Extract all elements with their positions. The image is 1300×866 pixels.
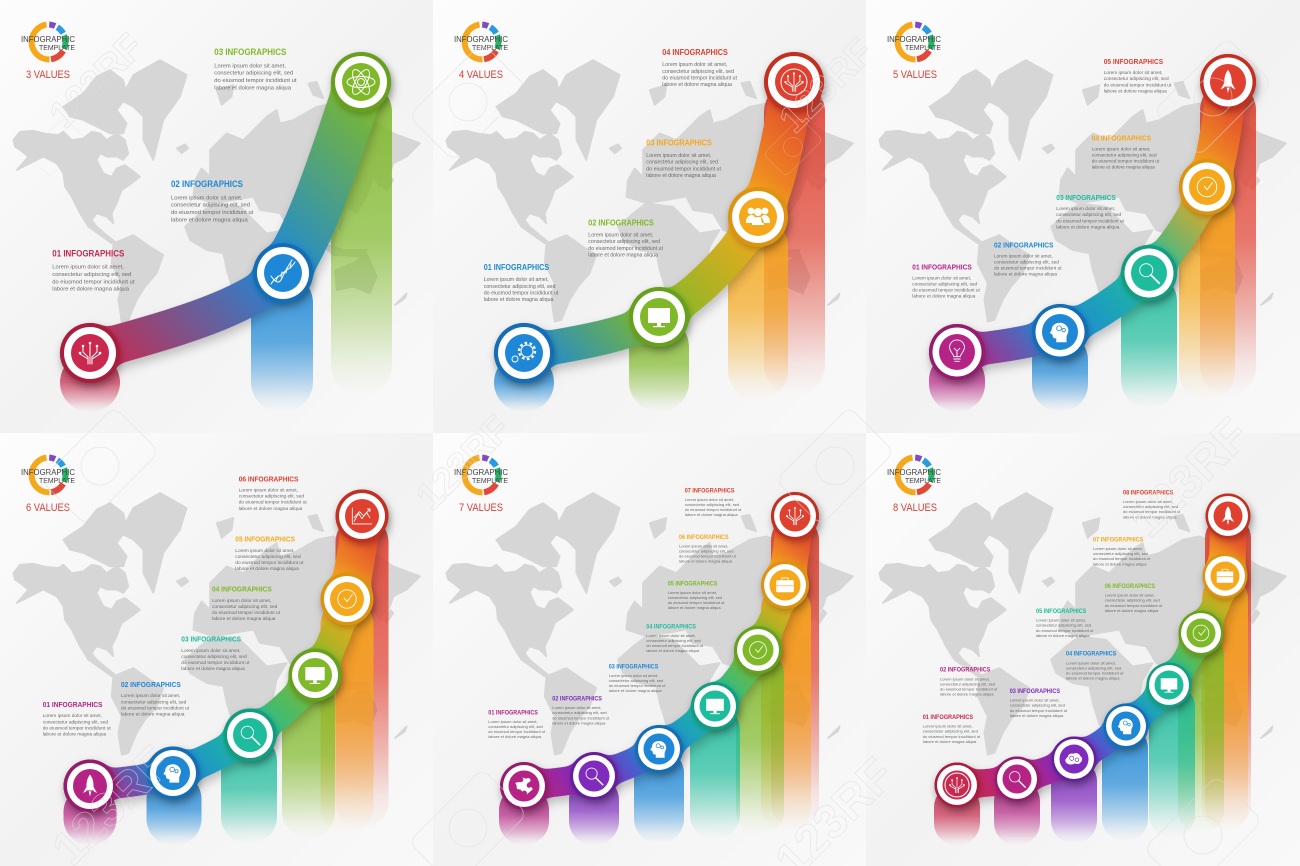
text block 02: Lorem ipsum dolor sit amet, xyxy=(588,232,653,238)
node 03 xyxy=(224,708,276,762)
logo: infographic template: TEMPLATE xyxy=(472,478,508,485)
text block 06: do eiusmod tempor incididunt ut xyxy=(679,554,737,559)
text block 01: Lorem ipsum dolor sit amet, xyxy=(488,719,538,724)
logo: infographic template xyxy=(454,24,508,59)
text block 04: consectetur adipiscing elit, sed xyxy=(1066,665,1121,670)
text block 05: labore et dolore magna aliqua xyxy=(1104,88,1167,94)
circle nodes and icons xyxy=(934,494,1250,808)
text block 03: labore et dolore magna aliqua xyxy=(1056,224,1120,230)
text block 01 xyxy=(923,714,981,744)
text block 04: do eiusmod tempor incididunt ut xyxy=(1066,671,1124,676)
node 05 xyxy=(1146,662,1192,708)
node 07 xyxy=(771,492,819,540)
text block 05 xyxy=(668,581,725,610)
node 07 xyxy=(1202,554,1248,598)
text block 02: 02 INFOGRAPHICS xyxy=(121,680,181,689)
text block 04: labore et dolore magna aliqua xyxy=(662,82,732,88)
text block 01: do eiusmod tempor incididunt ut xyxy=(43,725,111,731)
text block 04: consectetur adipiscing elit, sed xyxy=(212,604,278,610)
text block 07: labore et dolore magna aliqua xyxy=(685,512,738,517)
text block 05: do eiusmod tempor incididunt ut xyxy=(1104,82,1172,88)
text block 08: 08 INFOGRAPHICS xyxy=(1123,489,1173,496)
circle nodes and icons xyxy=(929,54,1256,380)
panel background xyxy=(866,0,1300,433)
text block 02: consectetur adipiscing elit, sed xyxy=(994,259,1059,265)
text block 08: do eiusmod tempor incididunt ut xyxy=(1123,509,1181,514)
text block 05: consectetur adipiscing elit, sed xyxy=(668,595,722,600)
text block 06: Lorem ipsum dolor sit amet, xyxy=(239,488,298,494)
text block 01: labore et dolore magna aliqua xyxy=(488,734,542,739)
text block 07: do eiusmod tempor incididunt ut xyxy=(1093,556,1151,561)
text block 06: consectetur adipiscing elit, sed xyxy=(239,494,304,500)
text block 04: Lorem ipsum dolor sit amet, xyxy=(212,598,271,604)
node 04 xyxy=(288,648,342,702)
text block 04: Lorem ipsum dolor sit amet, xyxy=(1066,660,1116,665)
panel: 7 values xyxy=(433,433,866,866)
text block 05: 05 INFOGRAPHICS xyxy=(1036,608,1086,615)
fading columns xyxy=(499,516,819,845)
text block 03: labore et dolore magna aliqua xyxy=(609,688,662,693)
text block 03: consectetur adipiscing elit, sed xyxy=(181,654,247,660)
fading columns xyxy=(494,82,825,412)
node 04 xyxy=(764,52,824,112)
node 02 xyxy=(994,756,1040,802)
world map xyxy=(879,493,1286,755)
logo: infographic template: TEMPLATE xyxy=(472,45,508,52)
text block 06 xyxy=(239,474,307,512)
circle nodes and icons xyxy=(494,52,824,383)
text block 02: labore et dolore magna aliqua xyxy=(121,711,185,717)
text block 03: 03 INFOGRAPHICS xyxy=(646,139,712,148)
text block 01: Lorem ipsum dolor sit amet, xyxy=(923,724,973,729)
text block 01 xyxy=(488,710,546,739)
text block 05: do eiusmod tempor incididunt ut xyxy=(1036,628,1094,633)
text block 04: 04 INFOGRAPHICS xyxy=(646,624,696,630)
text block 02: 02 INFOGRAPHICS xyxy=(940,667,990,674)
panel background xyxy=(433,433,866,866)
text block 02: Lorem ipsum dolor sit amet, xyxy=(552,705,602,710)
text block 04: 04 INFOGRAPHICS xyxy=(212,585,272,594)
text block 02: do eiusmod tempor incididunt ut xyxy=(994,266,1062,272)
text block 03: 03 INFOGRAPHICS xyxy=(1010,688,1060,695)
text block 03: labore et dolore magna aliqua xyxy=(1010,713,1064,718)
node 02 xyxy=(146,746,200,800)
watermark overlay: 123RF xyxy=(409,408,519,518)
text block 02: labore et dolore magna aliqua xyxy=(994,272,1057,278)
text block 07: do eiusmod tempor incididunt ut xyxy=(685,507,742,512)
logo: infographic template: INFOGRAPHIC xyxy=(887,467,941,477)
world map xyxy=(879,60,1286,322)
logo: infographic template: TEMPLATE xyxy=(39,45,75,52)
text block 06: consectetur adipiscing elit, sed xyxy=(1105,598,1160,603)
panel: 5 values xyxy=(866,0,1300,433)
text block 03: Lorem ipsum dolor sit amet, xyxy=(1056,206,1115,212)
text block 02: do eiusmod tempor incididunt ut xyxy=(588,246,663,252)
logo: infographic template xyxy=(21,24,75,59)
panel background xyxy=(866,433,1300,866)
panel: 3 values xyxy=(0,0,433,433)
text block 03: do eiusmod tempor incididunt ut xyxy=(1010,708,1068,713)
text block 03: consectetur adipiscing elit, sed xyxy=(1056,212,1122,218)
text block 05: 05 INFOGRAPHICS xyxy=(1104,57,1163,66)
heading: 7 values: 7 VALUES xyxy=(459,502,503,514)
text block 02: Lorem ipsum dolor sit amet, xyxy=(994,253,1053,259)
world map xyxy=(446,493,853,755)
logo: infographic template xyxy=(21,458,75,492)
text block 05: 05 INFOGRAPHICS xyxy=(668,581,717,587)
text block 04: consectetur adipiscing elit, sed xyxy=(662,69,734,75)
text block 02: Lorem ipsum dolor sit amet, xyxy=(171,195,243,201)
text block 08: labore et dolore magna aliqua xyxy=(1123,514,1177,519)
node 01 xyxy=(934,762,980,808)
node 04 xyxy=(1179,159,1235,215)
logo: infographic template: TEMPLATE xyxy=(39,478,75,485)
text block 05: consectetur adipiscing elit, sed xyxy=(1036,623,1091,628)
node 06 xyxy=(336,490,388,542)
text block 04: do eiusmod tempor incididunt ut xyxy=(212,610,281,616)
text block 01 xyxy=(484,263,559,303)
text block 06: Lorem ipsum dolor sit amet, xyxy=(679,543,728,548)
heading: 4 values: 4 VALUES xyxy=(459,69,503,81)
text block 02 xyxy=(121,680,190,717)
text block 01: do eiusmod tempor incididunt ut xyxy=(923,734,981,739)
text block 01: consectetur adipiscing elit, sed xyxy=(484,284,555,290)
text block 01: Lorem ipsum dolor sit amet, xyxy=(484,277,549,283)
heading: 8 values: 8 VALUES xyxy=(893,502,937,514)
text block 01: labore et dolore magna aliqua xyxy=(923,739,977,744)
node 06 xyxy=(1178,610,1224,656)
text block 03: labore et dolore magna aliqua xyxy=(214,85,292,91)
text block 06 xyxy=(679,535,737,564)
text block 02 xyxy=(994,240,1062,278)
text block 04: 04 INFOGRAPHICS xyxy=(1092,133,1151,142)
text block 02: 02 INFOGRAPHICS xyxy=(994,240,1054,249)
text block 04: do eiusmod tempor incididunt ut xyxy=(662,76,737,82)
text block 01: 01 INFOGRAPHICS xyxy=(488,710,538,716)
text block 03: 03 INFOGRAPHICS xyxy=(1056,193,1116,202)
text block 01: consectetur adipiscing elit, sed xyxy=(912,281,978,287)
text block 05: consectetur adipiscing elit, sed xyxy=(235,554,301,560)
fading columns xyxy=(929,82,1256,412)
text block 04: consectetur adipiscing elit, sed xyxy=(646,638,701,643)
node 03 xyxy=(1121,245,1177,301)
logo: infographic template: INFOGRAPHIC xyxy=(454,467,508,477)
text block 02: 02 INFOGRAPHICS xyxy=(171,179,243,189)
text block 01: do eiusmod tempor incididunt ut xyxy=(488,729,546,734)
node 08 xyxy=(1206,494,1250,538)
text block 02: consectetur adipiscing elit, sed xyxy=(121,699,187,705)
text block 07 xyxy=(1093,536,1151,566)
text block 03: Lorem ipsum dolor sit amet, xyxy=(646,153,711,159)
world map xyxy=(13,493,420,755)
text block 01: consectetur adipiscing elit, sed xyxy=(52,272,131,278)
text block 05: labore et dolore magna aliqua xyxy=(235,566,299,572)
text block 01: consectetur adipiscing elit, sed xyxy=(923,729,978,734)
text block 03 xyxy=(609,664,666,693)
logo: infographic template xyxy=(887,24,941,59)
panel: 6 values xyxy=(0,433,433,866)
text block 03: do eiusmod tempor incididunt ut xyxy=(609,683,666,688)
text block 04: do eiusmod tempor incididunt ut xyxy=(646,643,704,648)
heading: 3 values: 3 VALUES xyxy=(26,69,70,81)
panel background xyxy=(0,0,433,433)
node 01 xyxy=(494,323,554,383)
text block 02 xyxy=(171,179,254,223)
text block 07: labore et dolore magna aliqua xyxy=(1093,561,1147,566)
text block 03: labore et dolore magna aliqua xyxy=(646,173,716,179)
node 04 xyxy=(691,682,739,730)
text block 01: 01 INFOGRAPHICS xyxy=(923,714,973,721)
text block 01: 01 INFOGRAPHICS xyxy=(52,248,124,258)
circle nodes and icons xyxy=(500,492,819,810)
text block 02: 02 INFOGRAPHICS xyxy=(588,218,654,227)
circle nodes and icons xyxy=(64,490,388,812)
ribbon xyxy=(64,490,388,812)
text block 03: labore et dolore magna aliqua xyxy=(181,666,245,672)
node 03 xyxy=(635,725,683,773)
circle nodes and icons xyxy=(60,52,391,383)
text block 03: Lorem ipsum dolor sit amet, xyxy=(1010,698,1060,703)
text block 06: 06 INFOGRAPHICS xyxy=(679,535,729,541)
text block 06: 06 INFOGRAPHICS xyxy=(239,474,299,483)
text block 01: Lorem ipsum dolor sit amet, xyxy=(52,265,124,271)
text block 05: labore et dolore magna aliqua xyxy=(668,605,721,610)
text block 03 xyxy=(181,635,250,672)
node 01 xyxy=(500,762,548,810)
node 01 xyxy=(64,760,116,812)
text block 02 xyxy=(940,667,998,697)
text block 03 xyxy=(214,47,297,91)
text block 02: Lorem ipsum dolor sit amet, xyxy=(121,693,180,699)
text block 03 xyxy=(1010,688,1068,718)
text block 04: labore et dolore magna aliqua xyxy=(212,616,276,622)
text block 08: consectetur adipiscing elit, sed xyxy=(1123,504,1178,509)
ribbon xyxy=(929,54,1256,380)
text block 05: Lorem ipsum dolor sit amet, xyxy=(235,548,294,554)
text block 02: do eiusmod tempor incididunt ut xyxy=(552,715,610,720)
text block 06: do eiusmod tempor incididunt ut xyxy=(239,500,307,506)
node 05 xyxy=(734,626,782,674)
text block 08: Lorem ipsum dolor sit amet, xyxy=(1123,499,1173,504)
text block 05 xyxy=(1104,57,1172,94)
text block 02: consectetur adipiscing elit, sed xyxy=(171,203,250,209)
text block 02: do eiusmod tempor incididunt ut xyxy=(171,210,254,216)
text block 01: consectetur adipiscing elit, sed xyxy=(488,724,543,729)
world map xyxy=(13,60,420,322)
ribbon xyxy=(934,494,1250,808)
text block 06: do eiusmod tempor incididunt ut xyxy=(1105,603,1163,608)
panel: 8 values xyxy=(866,433,1300,866)
node 04 xyxy=(1104,704,1148,748)
text block 03: consectetur adipiscing elit, sed xyxy=(646,160,718,166)
text block 07: Lorem ipsum dolor sit amet, xyxy=(685,497,734,502)
text block 03: Lorem ipsum dolor sit amet, xyxy=(609,673,658,678)
text block 02: labore et dolore magna aliqua xyxy=(552,720,606,725)
text block 04: do eiusmod tempor incididunt ut xyxy=(1092,159,1160,165)
text block 01 xyxy=(43,700,111,737)
ribbon xyxy=(60,52,391,383)
node 05 xyxy=(1200,54,1256,110)
text block 02 xyxy=(588,218,663,259)
text block 05: 05 INFOGRAPHICS xyxy=(235,535,295,544)
text block 07 xyxy=(685,488,742,517)
text block 06: labore et dolore magna aliqua xyxy=(1105,608,1159,613)
watermark overlay: 123RF xyxy=(772,31,882,141)
watermark overlay: 123RF xyxy=(1120,408,1260,548)
text block 03: do eiusmod tempor incididunt ut xyxy=(646,166,721,172)
logo: infographic template: TEMPLATE xyxy=(905,478,941,485)
text block 07: Lorem ipsum dolor sit amet, xyxy=(1093,546,1143,551)
text block 05: do eiusmod tempor incididunt ut xyxy=(235,560,304,566)
text block 01: do eiusmod tempor incididunt ut xyxy=(52,279,135,285)
node 03 xyxy=(1052,736,1096,782)
text block 07: 07 INFOGRAPHICS xyxy=(1093,536,1143,543)
node 02 xyxy=(570,752,618,800)
text block 04: Lorem ipsum dolor sit amet, xyxy=(1092,146,1151,152)
logo: infographic template xyxy=(454,458,508,492)
text block 01: Lorem ipsum dolor sit amet, xyxy=(912,275,971,281)
text block 07: consectetur adipiscing elit, sed xyxy=(685,502,739,507)
text block 01: 01 INFOGRAPHICS xyxy=(912,262,972,271)
text block 02: labore et dolore magna aliqua xyxy=(588,253,658,259)
node 03 xyxy=(728,187,788,247)
text block 08 xyxy=(1123,489,1181,519)
logo: infographic template: INFOGRAPHIC xyxy=(21,467,75,477)
panel background xyxy=(433,0,866,433)
logo: infographic template xyxy=(887,458,941,492)
text block 03: do eiusmod tempor incididunt ut xyxy=(181,660,250,666)
node 02 xyxy=(1032,304,1088,360)
text block 01: labore et dolore magna aliqua xyxy=(43,731,107,737)
text block 04: Lorem ipsum dolor sit amet, xyxy=(662,62,727,68)
text block 01: Lorem ipsum dolor sit amet, xyxy=(43,713,102,719)
text block 01: labore et dolore magna aliqua xyxy=(912,294,976,300)
text block 02: labore et dolore magna aliqua xyxy=(171,217,248,223)
node 06 xyxy=(761,561,809,609)
text block 05: labore et dolore magna aliqua xyxy=(1036,633,1090,638)
text block 04: labore et dolore magna aliqua xyxy=(1066,676,1120,681)
text block 04 xyxy=(646,624,704,653)
text block 04: labore et dolore magna aliqua xyxy=(646,648,700,653)
text block 03: 03 INFOGRAPHICS xyxy=(181,635,241,644)
text block 03: Lorem ipsum dolor sit amet, xyxy=(214,63,286,69)
text block 01: labore et dolore magna aliqua xyxy=(484,297,553,303)
text block 04: consectetur adipiscing elit, sed xyxy=(1092,152,1157,158)
node 01 xyxy=(929,324,985,380)
text block 06: Lorem ipsum dolor sit amet, xyxy=(1105,593,1155,598)
text block 07: 07 INFOGRAPHICS xyxy=(685,488,734,494)
text block 01: do eiusmod tempor incididunt ut xyxy=(912,288,981,294)
watermark overlay: 123RF xyxy=(42,26,152,136)
text block 03: do eiusmod tempor incididunt ut xyxy=(1056,218,1125,224)
text block 03 xyxy=(646,139,721,179)
logo: infographic template: INFOGRAPHIC xyxy=(21,34,75,44)
text block 04 xyxy=(1066,651,1124,681)
text block 04: Lorem ipsum dolor sit amet, xyxy=(646,633,696,638)
logo: infographic template: INFOGRAPHIC xyxy=(454,34,508,44)
text block 01: labore et dolore magna aliqua xyxy=(52,287,130,293)
node 05 xyxy=(320,572,374,626)
fading columns xyxy=(60,82,392,412)
text block 05: Lorem ipsum dolor sit amet, xyxy=(1104,70,1163,76)
text block 02: labore et dolore magna aliqua xyxy=(940,692,994,697)
panel background xyxy=(0,433,433,866)
text block 05: Lorem ipsum dolor sit amet, xyxy=(668,590,717,595)
heading: 6 values: 6 VALUES xyxy=(26,502,70,514)
fading columns xyxy=(934,516,1251,845)
text block 03: do eiusmod tempor incididunt ut xyxy=(214,78,297,84)
text block 02: Lorem ipsum dolor sit amet, xyxy=(940,676,990,681)
node 02 xyxy=(629,287,689,347)
text block 05: do eiusmod tempor incididunt ut xyxy=(668,600,725,605)
panel: 4 values xyxy=(433,0,866,433)
text block 03: consectetur adipiscing elit, sed xyxy=(1010,703,1065,708)
text block 04 xyxy=(212,585,281,622)
text block 02: consectetur adipiscing elit, sed xyxy=(940,681,995,686)
text block 06 xyxy=(1105,583,1163,613)
text block 01: do eiusmod tempor incididunt ut xyxy=(484,291,559,297)
text block 04: 04 INFOGRAPHICS xyxy=(662,48,728,57)
text block 06: labore et dolore magna aliqua xyxy=(239,506,303,512)
text block 01: 01 INFOGRAPHICS xyxy=(484,263,550,272)
text block 03: Lorem ipsum dolor sit amet, xyxy=(181,648,240,654)
text block 04 xyxy=(1092,133,1160,171)
node 02 xyxy=(253,243,313,303)
text block 06: 06 INFOGRAPHICS xyxy=(1105,583,1155,590)
text block 02: consectetur adipiscing elit, sed xyxy=(588,239,660,245)
text block 06: labore et dolore magna aliqua xyxy=(679,559,733,564)
text block 02: do eiusmod tempor incididunt ut xyxy=(121,705,190,711)
text block 03 xyxy=(1056,193,1125,230)
text block 01 xyxy=(912,262,981,300)
logo: infographic template: INFOGRAPHIC xyxy=(887,34,941,44)
text block 04: 04 INFOGRAPHICS xyxy=(1066,651,1116,658)
text block 01: consectetur adipiscing elit, sed xyxy=(43,719,108,725)
text block 06: consectetur adipiscing elit, sed xyxy=(679,549,733,554)
text block 03: consectetur adipiscing elit, sed xyxy=(609,678,663,683)
node 01 xyxy=(60,323,120,383)
text block 02: do eiusmod tempor incididunt ut xyxy=(940,687,998,692)
text block 04 xyxy=(662,48,737,88)
text block 02: 02 INFOGRAPHICS xyxy=(552,697,602,703)
text block 03: 03 INFOGRAPHICS xyxy=(214,47,286,57)
text block 05 xyxy=(235,535,304,572)
logo: infographic template: TEMPLATE xyxy=(905,45,941,52)
text block 04: labore et dolore magna aliqua xyxy=(1092,165,1155,171)
text block 03: consectetur adipiscing elit, sed xyxy=(214,71,293,77)
text block 07: consectetur adipiscing elit, sed xyxy=(1093,551,1148,556)
text block 01: 01 INFOGRAPHICS xyxy=(43,700,103,709)
ribbon xyxy=(500,492,819,810)
text block 03: 03 INFOGRAPHICS xyxy=(609,664,658,670)
world map xyxy=(446,60,853,322)
text block 01 xyxy=(52,248,135,293)
text block 05 xyxy=(1036,608,1094,638)
text block 05: Lorem ipsum dolor sit amet, xyxy=(1036,618,1086,623)
ribbon xyxy=(494,52,824,383)
node 03 xyxy=(331,52,391,112)
fading columns xyxy=(64,516,388,845)
heading: 5 values: 5 VALUES xyxy=(893,69,937,81)
text block 02: consectetur adipiscing elit, sed xyxy=(552,710,607,715)
text block 05: consectetur adipiscing elit, sed xyxy=(1104,76,1169,82)
text block 02 xyxy=(552,697,610,725)
